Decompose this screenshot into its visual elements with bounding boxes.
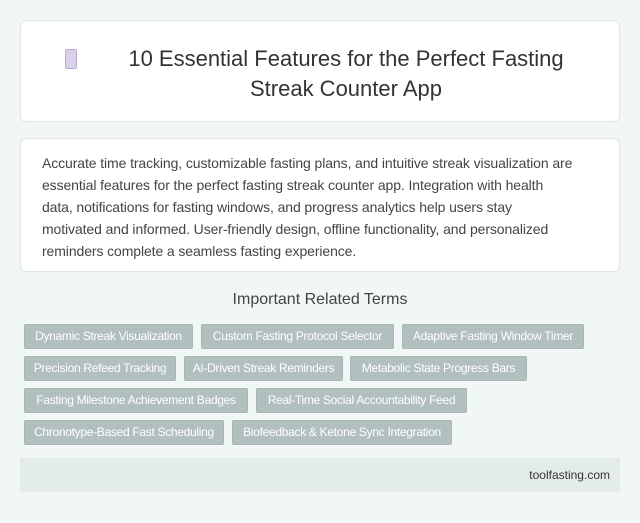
- tags: Fasting Milestone Achievement Badges: [36, 393, 236, 407]
- title: 10 Essential Features for the Perfect Fasting Streak Counter App: [128, 46, 564, 101]
- tags: Adaptive Fasting Window Timer: [413, 329, 573, 343]
- tags: Dynamic Streak Visualization: [35, 329, 182, 343]
- tags: AI-Driven Streak Reminders: [193, 361, 334, 375]
- description text: [42, 155, 572, 259]
- tags: [24, 324, 584, 445]
- description text: essential features for the perfect fasting streak counter app. Integration with health: [42, 177, 543, 193]
- description text: reminders complete a seamless fasting experience.: [42, 243, 356, 259]
- title card: [20, 20, 620, 122]
- tags: Biofeedback & Ketone Sync Integration: [243, 425, 441, 439]
- tags: Custom Fasting Protocol Selector: [213, 329, 382, 343]
- heading: related terms: Important Related Terms: [233, 291, 407, 308]
- tags: Precision Refeed Tracking: [34, 361, 166, 375]
- tags: Chronotype-Based Fast Scheduling: [34, 425, 214, 439]
- tags: Metabolic State Progress Bars: [362, 361, 515, 375]
- footer text: toolfasting.com: [529, 468, 610, 482]
- description card: [20, 138, 620, 272]
- description text: Accurate time tracking, customizable fasting plans, and intuitive streak visualization are: [42, 155, 572, 171]
- description text: data, notifications for fasting windows, and progress analytics help users stay: [42, 199, 512, 215]
- description text: motivated and informed. User-friendly design, offline functionality, and personalized: [42, 221, 548, 237]
- icon: scroll: [65, 49, 77, 69]
- tags: Real-Time Social Accountability Feed: [268, 393, 455, 407]
- footer: [20, 458, 620, 492]
